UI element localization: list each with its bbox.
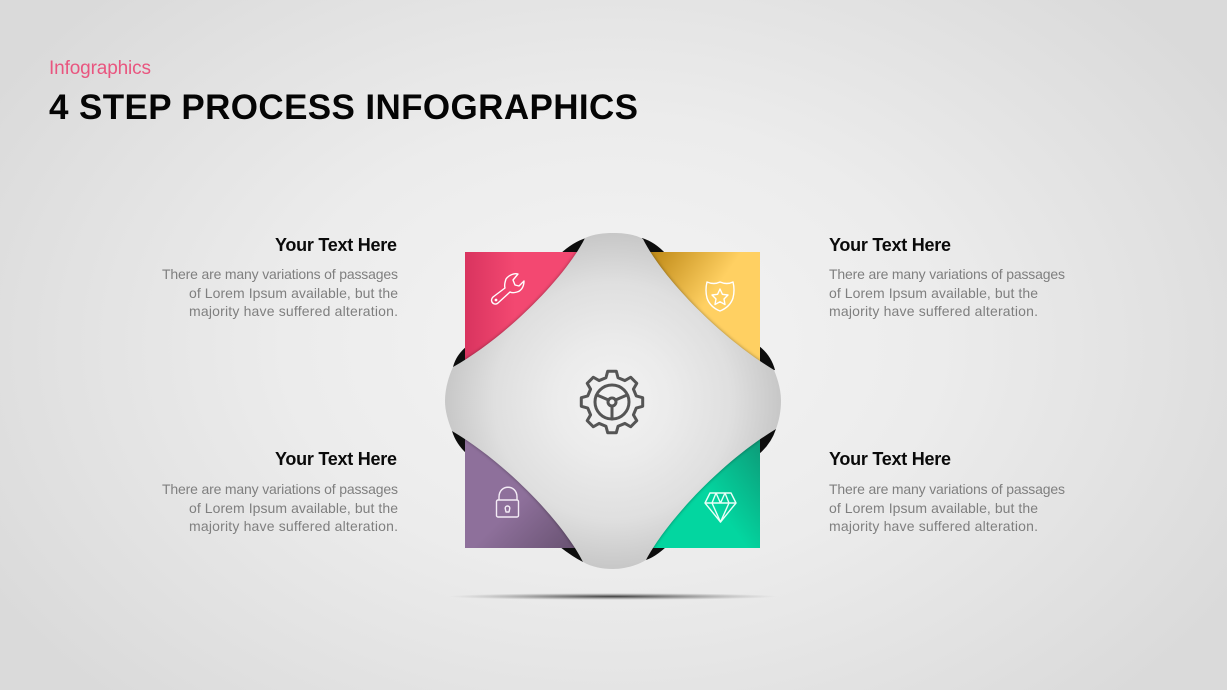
central curved panel bbox=[445, 233, 781, 569]
text block: top right: majority have suffered alteration. bbox=[829, 303, 1038, 319]
icon: shield with star bbox=[706, 282, 734, 311]
black fold tips bbox=[452, 238, 776, 562]
panel: yellow square bbox=[613, 252, 760, 401]
curved panel edge shadow bbox=[465, 252, 760, 548]
subtitle: Infographics bbox=[49, 58, 151, 79]
panel: pink square bbox=[465, 252, 613, 401]
text block: top left: There are many variations of passages bbox=[162, 266, 398, 282]
text block: bottom right: There are many variations of passages bbox=[829, 481, 1065, 497]
text block: top left: of Lorem Ipsum available, but the bbox=[189, 285, 398, 301]
text block: top right bbox=[829, 235, 1065, 319]
text block: bottom left: Your Text Here bbox=[275, 449, 397, 469]
text block: bottom right: of Lorem Ipsum available, but the bbox=[829, 500, 1038, 516]
icon: padlock bbox=[496, 487, 518, 517]
text block: top right: There are many variations of passages bbox=[829, 266, 1065, 282]
text block: top right: of Lorem Ipsum available, but the bbox=[829, 285, 1038, 301]
text block: top left: majority have suffered alteration. bbox=[189, 303, 398, 319]
panel: green square bbox=[613, 401, 760, 548]
text block: bottom left: There are many variations of passages bbox=[162, 481, 398, 497]
text block: top right: Your Text Here bbox=[829, 235, 951, 255]
panel: purple square bbox=[465, 401, 613, 548]
text block: bottom right bbox=[829, 449, 1065, 534]
text block: top left bbox=[162, 235, 398, 319]
text block: top left: Your Text Here bbox=[275, 235, 397, 255]
text block: bottom right: majority have suffered alteration. bbox=[829, 518, 1038, 534]
title: 4 STEP PROCESS INFOGRAPHICS bbox=[49, 88, 638, 127]
text block: bottom left: of Lorem Ipsum available, but the bbox=[189, 500, 398, 516]
icon: wrench bbox=[492, 274, 524, 304]
icon: gear with steering wheel bbox=[581, 371, 643, 433]
ground shadow bbox=[448, 593, 778, 600]
text block: bottom left: majority have suffered alteration. bbox=[189, 518, 398, 534]
text block: bottom left bbox=[162, 449, 398, 534]
text block: bottom right: Your Text Here bbox=[829, 449, 951, 469]
icon: diamond bbox=[705, 493, 736, 522]
